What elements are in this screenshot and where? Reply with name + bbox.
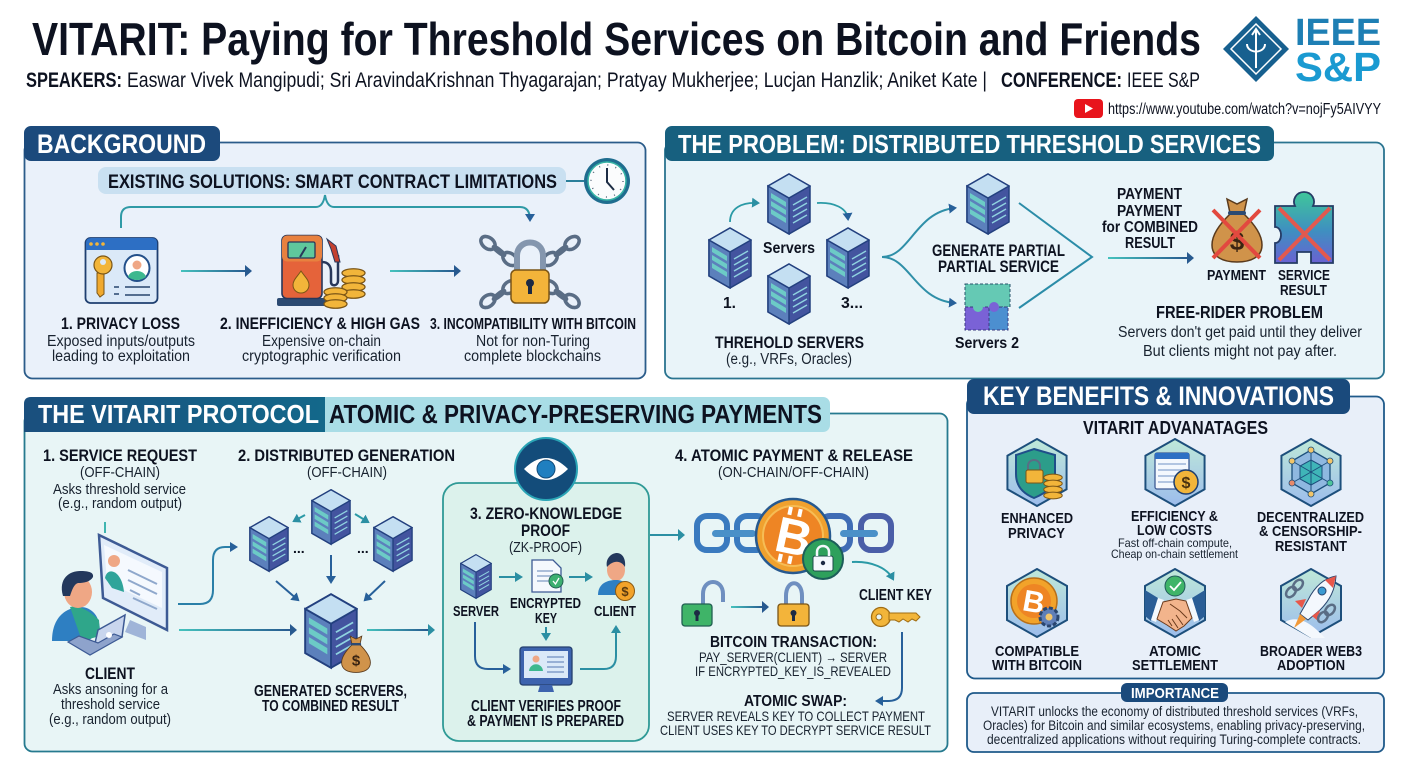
text: atomic swap: ATOMIC SWAP: [744,693,847,710]
step 2 text: distributed generation: (OFF-CHAIN) [307,464,387,481]
labels: server, encrypted key, client [453,596,636,627]
icon: chains and lock [478,234,582,310]
arrows: fork to partial services [882,208,955,303]
speakers and conference line: CONFERENCE: [1001,69,1122,92]
icon: closed lock [778,583,809,626]
client key label and icon [859,587,933,626]
heading: the problem: THE PROBLEM: DISTRIBUTED THRESHOLD SERVICES [678,129,1261,159]
text: free-rider problem: But clients might not pay after. [1143,343,1337,360]
icon: gas pump and coins [277,236,365,308]
step 2 text: distributed generation: 2. DISTRIBUTED GENERATION [238,446,455,465]
diagram: distributed servers: ... [357,540,369,556]
heading: key benefits: KEY BENEFITS & INNOVATIONS [983,381,1334,411]
text: payment for combined result: PAYMENT [1117,203,1182,220]
client text: CLIENT [85,665,135,683]
benefit: atomic settlement: ATOMIC [1149,643,1201,660]
icon: eye badge [515,438,577,500]
arrow [569,576,591,578]
heading: the vitarit protocol [24,397,830,432]
subheading pill: EXISTING SOLUTIONS: SMART CONTRACT LIMITATIONS [108,171,557,193]
arrow: combiner to zk-proof [367,624,435,636]
benefit: decentralized: DECENTRALIZED [1257,509,1364,526]
step 4 text [675,446,913,481]
labels: server, encrypted key, client: KEY [535,611,557,627]
text: generate partial service: GENERATE PARTIAL [932,242,1065,260]
benefit: atomic settlement: SETTLEMENT [1132,657,1218,674]
text: importance: VITARIT unlocks the economy of distributed threshold services (VRFs, [991,704,1358,719]
labels: server, encrypted key, client: CLIENT [594,604,636,620]
diagram: threshold servers: 1. [723,295,736,312]
icon: open lock [682,582,723,626]
text: atomic swap: SERVER REVEALS KEY TO COLLECT PAYMENT [667,708,925,724]
generated result text: TO COMBINED RESULT [262,698,399,715]
text: incompatibility: Not for non-Turing [476,333,590,350]
benefit: enhanced privacy: ENHANCED [1001,510,1073,527]
text: incompatibility: 3. INCOMPATIBILITY WITH BITCOIN [430,316,636,333]
benefit: enhanced privacy [1001,439,1073,542]
text: atomic swap [660,693,931,738]
logo: IEEE S&P [1223,12,1381,90]
title: VITARIT: Paying for Threshold Services on Bitcoin and Friends [32,13,1201,65]
arrow [181,265,252,277]
icon: puzzle pieces [965,284,1010,330]
arrow: to client key [852,562,893,579]
logo: IEEE S&P: IEEE [1295,12,1381,54]
diagram: threshold servers: THREHOLD SERVERS [715,334,864,352]
arrow [390,265,461,277]
benefit: efficiency and low costs [1111,439,1239,561]
text: free-rider problem: FREE-RIDER PROBLEM [1156,302,1323,322]
panel: background [24,126,646,378]
speakers and conference line: IEEE S&P [1127,69,1200,92]
icon: crossed-out money bag [1212,199,1262,262]
icon: server [967,174,1009,234]
text: payment for combined result: for COMBINED [1102,219,1198,236]
text: client verifies proof: CLIENT VERIFIES PROOF [471,698,621,715]
step 1 text: service request: 1. SERVICE REQUEST [43,446,198,465]
benefit: broader web3 adoption [1260,569,1362,674]
step 4 text: 4. ATOMIC PAYMENT & RELEASE [675,446,913,465]
panel: key benefits [967,379,1384,678]
labels: payment and service result: SERVICE [1278,267,1330,284]
speakers and conference line: SPEAKERS: [26,69,122,92]
diagram: threshold servers: Servers [763,240,815,257]
client text: (e.g., random output) [49,712,171,728]
benefit: compatible with bitcoin: B [1020,584,1047,621]
benefit: decentralized: & CENSORSHIP- [1259,523,1362,540]
benefit: broader web3 adoption: ADOPTION [1277,657,1345,674]
text: inefficiency [220,315,420,365]
diagram: threshold servers: 3... [841,295,863,312]
icon: bitcoin on chain with lock [697,499,891,579]
text: importance: Oracles) for Bitcoin and similar ecosystems, enabling privacy-preserving, [983,718,1365,733]
sub-panel: zero-knowledge proof [443,438,649,741]
text: client verifies proof: & PAYMENT IS PREPARED [467,713,624,730]
step 3 text: PROOF [521,522,570,540]
client text [49,665,171,728]
benefit: decentralized [1257,439,1364,555]
icon: bitcoin on chain with lock: B [770,506,817,568]
benefit: compatible with bitcoin: COMPATIBLE [995,643,1079,660]
speakers and conference line: Easwar Vivek Mangipudi; Sri AravindaKrishnan Thyagarajan; Pratyay Mukherjee; Lucjan Hanzlik; Aniket Kate | [127,69,987,92]
labels: payment and service result [1207,267,1330,299]
text: inefficiency: Expensive on-chain [262,333,381,350]
text: bitcoin transaction: IF ENCRYPTED_KEY_IS_REVEALED [695,663,891,679]
benefit: compatible with bitcoin: WITH BITCOIN [992,657,1082,674]
panel: the vitarit protocol [24,397,948,752]
arrow [1108,252,1194,264]
diagram: threshold servers: (e.g., VRFs, Oracles) [726,351,852,368]
brace connector [121,195,530,228]
icon: client at monitor and laptop [52,522,167,655]
step 1 text: service request: (OFF-CHAIN) [80,464,160,481]
client key label and icon: CLIENT KEY [859,587,933,604]
benefit: efficiency and low costs: $ [1182,475,1191,492]
step 3 text: 3. ZERO-KNOWLEDGE [470,505,622,523]
icon: verification monitor [520,647,572,692]
heading: importance: IMPORTANCE [1131,685,1219,702]
text: client verifies proof [467,698,624,730]
step 1 text: service request: Asks threshold service [53,482,186,498]
benefit: enhanced privacy: PRIVACY [1008,525,1065,542]
icon: document with check [532,560,563,592]
generated result text: GENERATED SCERVERS, [254,683,407,700]
step 2 text: distributed generation [238,446,455,481]
benefit: efficiency and low costs: Fast off-chain compute, [1118,536,1232,550]
labels: server, encrypted key, client: ENCRYPTED [510,596,581,612]
logo: IEEE S&P: S&P [1295,44,1381,90]
heading: the vitarit protocol: THE VITARIT PROTOCOL [38,399,319,429]
client text: Asks ansoning for a [53,682,169,698]
text: privacy loss: Exposed inputs/outputs [47,333,195,350]
text: generate partial service: Servers 2 [955,335,1019,352]
benefit: broader web3 adoption: BROADER WEB3 [1260,643,1362,660]
subheading: advantages: VITARIT ADVANATAGES [1083,418,1268,438]
client text: threshold service [61,697,160,713]
icon: client with coin [598,553,634,600]
arrow: client to combiner [179,624,297,636]
panel: the problem [665,126,1384,378]
diagram: threshold servers [709,174,869,368]
text: incompatibility [430,316,636,365]
text: privacy loss [47,315,195,365]
arrow [731,601,769,613]
icon: client with coin: $ [621,584,629,599]
panel: importance [967,683,1384,752]
text: payment for combined result [1102,186,1198,252]
benefit: efficiency and low costs: Cheap on-chain settlement [1111,547,1239,561]
step 1 text: service request [43,446,198,512]
heading: background: BACKGROUND [37,129,206,159]
text: bitcoin transaction: BITCOIN TRANSACTION: [710,634,877,651]
diagram: distributed servers [250,490,412,672]
benefit: efficiency and low costs: EFFICIENCY & [1131,508,1218,525]
labels: payment and service result: PAYMENT [1207,267,1266,284]
icon: clock [566,158,630,204]
arrow: zk-proof to atomic payment [650,529,685,541]
text: free-rider problem: Servers don't get paid until they deliver [1118,324,1362,341]
icon: server [461,555,491,598]
diagram: distributed servers: ... [293,540,305,556]
step 3 text [470,505,622,556]
text: importance: decentralized applications without requiring Turing-complete contracts. [987,732,1361,747]
text: generate partial service: PARTIAL SERVICE [938,258,1059,276]
text: payment for combined result: RESULT [1125,235,1175,252]
arrow [499,576,521,578]
generated result text [254,683,407,715]
text: inefficiency: cryptographic verification [242,348,401,365]
text: bitcoin transaction: PAY_SERVER(CLIENT) → SERVER [699,649,887,665]
text: importance [983,704,1365,747]
text: generate partial service [932,242,1065,352]
text: inefficiency: 2. INEFFICIENCY & HIGH GAS [220,315,420,333]
text: bitcoin transaction [695,634,891,679]
benefit: decentralized: RESISTANT [1275,538,1347,555]
step 4 text: (ON-CHAIN/OFF-CHAIN) [718,464,869,481]
text: free-rider problem [1118,302,1362,360]
step 1 text: service request: (e.g., random output) [58,496,182,512]
text: atomic swap: CLIENT USES KEY TO DECRYPT SERVICE RESULT [660,722,931,738]
benefit: compatible with bitcoin [992,569,1082,674]
benefit: atomic settlement [1132,569,1218,674]
labels: server, encrypted key, client: SERVER [453,604,499,620]
text: privacy loss: leading to exploitation [52,348,190,365]
icon: privacy loss window [86,238,158,303]
arrow: client to servers [178,547,236,604]
arrows inside zk box [475,622,616,669]
text: privacy loss: 1. PRIVACY LOSS [61,315,180,333]
icon: crossed-out puzzle piece [1275,192,1333,263]
text: incompatibility: complete blockchains [464,348,601,365]
benefit: efficiency and low costs: LOW COSTS [1137,522,1212,539]
arrow: key to atomic swap [877,632,902,701]
heading: the vitarit protocol: ATOMIC & PRIVACY-PRESERVING PAYMENTS [329,399,822,429]
labels: payment and service result: RESULT [1280,282,1327,299]
step 3 text: (ZK-PROOF) [509,539,582,556]
chevron bracket [1019,203,1092,308]
text: payment for combined result: PAYMENT [1117,186,1182,203]
